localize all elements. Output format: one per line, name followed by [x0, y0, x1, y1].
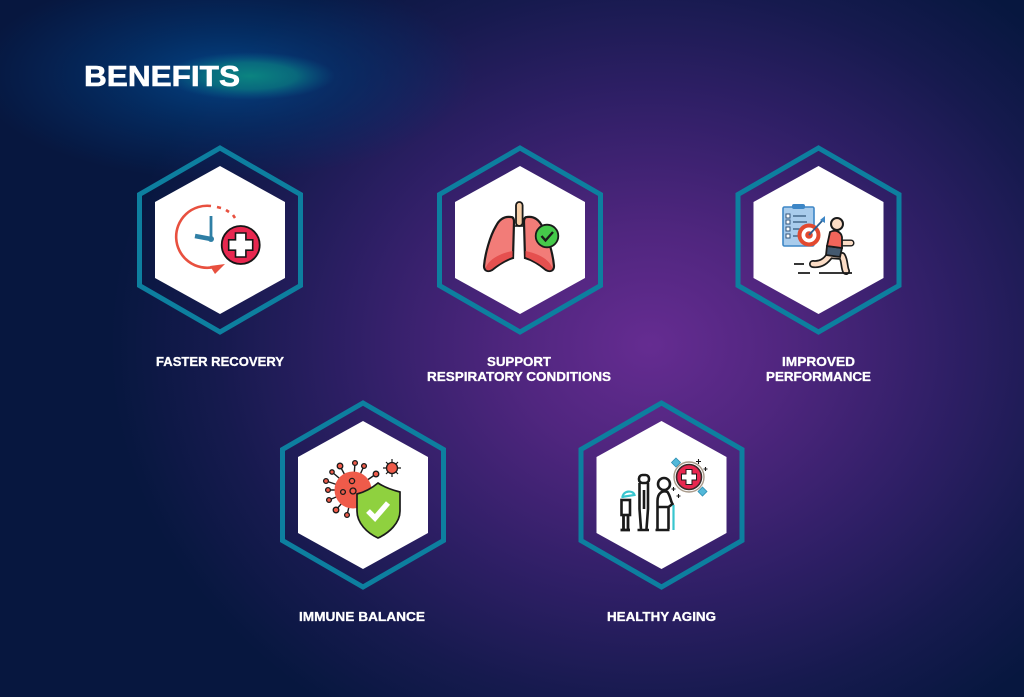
- label: improved performance: PERFORMANCE: [766, 369, 871, 384]
- label: improved performance: IMPROVED: [782, 354, 855, 369]
- hexagon badge: immune: [282, 403, 444, 587]
- icon: three life stages with medical cross: [620, 458, 708, 530]
- icon: lungs with check: [484, 202, 558, 271]
- label: support respiratory conditions: SUPPORT: [487, 354, 551, 369]
- label: support respiratory conditions: RESPIRATORY CONDITIONS: [427, 369, 611, 384]
- panel: immune balance: [282, 403, 444, 624]
- label: improved performance: [766, 354, 871, 384]
- panel: faster recovery: [140, 148, 300, 369]
- icon: clock with medical cross: [176, 206, 260, 274]
- panel: healthy aging: [581, 403, 742, 624]
- label: faster recovery: FASTER RECOVERY: [156, 354, 284, 369]
- hexagon badge: performance: [738, 148, 899, 332]
- panel: improved performance: [738, 148, 899, 384]
- label: support respiratory conditions: [427, 354, 611, 384]
- icon: clipboard, target and runner: [783, 204, 852, 273]
- icon: virus and shield: [324, 459, 401, 538]
- hexagon badge: respiratory: [440, 148, 600, 332]
- panel: support respiratory conditions: [427, 148, 611, 384]
- hexagon badge: faster recovery: [140, 148, 300, 332]
- hexagon badge: aging: [581, 403, 742, 587]
- label: healthy aging: HEALTHY AGING: [607, 609, 716, 624]
- label: immune balance: IMMUNE BALANCE: [299, 609, 425, 624]
- title: BENEFITS: [84, 61, 240, 93]
